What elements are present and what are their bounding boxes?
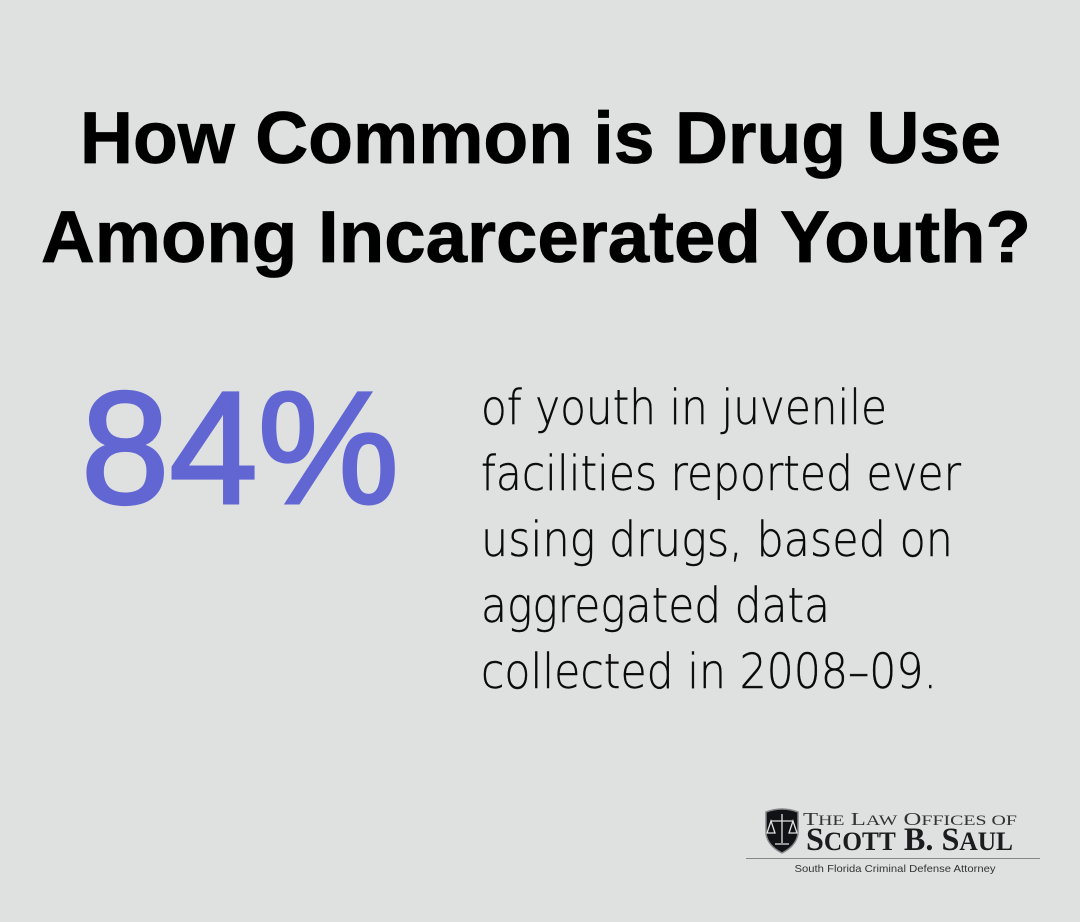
statistic: 84%: 84% <box>81 358 399 537</box>
tagline: South Florida Criminal Defense Attorney <box>794 863 996 875</box>
description text: of youth in juvenile <box>481 380 887 436</box>
law office logo: SCOTT B. SAUL <box>806 822 1013 858</box>
description text: collected in 2008–09. <box>481 644 937 700</box>
description text: aggregated data <box>481 578 830 634</box>
law office logo <box>746 809 1040 875</box>
description text: facilities reported ever <box>481 446 961 502</box>
title: Among Incarcerated Youth? <box>41 197 1031 278</box>
description text <box>481 380 961 700</box>
firm name: T HE L AW O FFICES OF <box>803 809 1017 829</box>
icon: shield with scales <box>766 809 798 853</box>
description text: using drugs, based on <box>481 512 953 568</box>
title: How Common is Drug Use <box>80 98 1001 179</box>
title <box>41 98 1031 278</box>
